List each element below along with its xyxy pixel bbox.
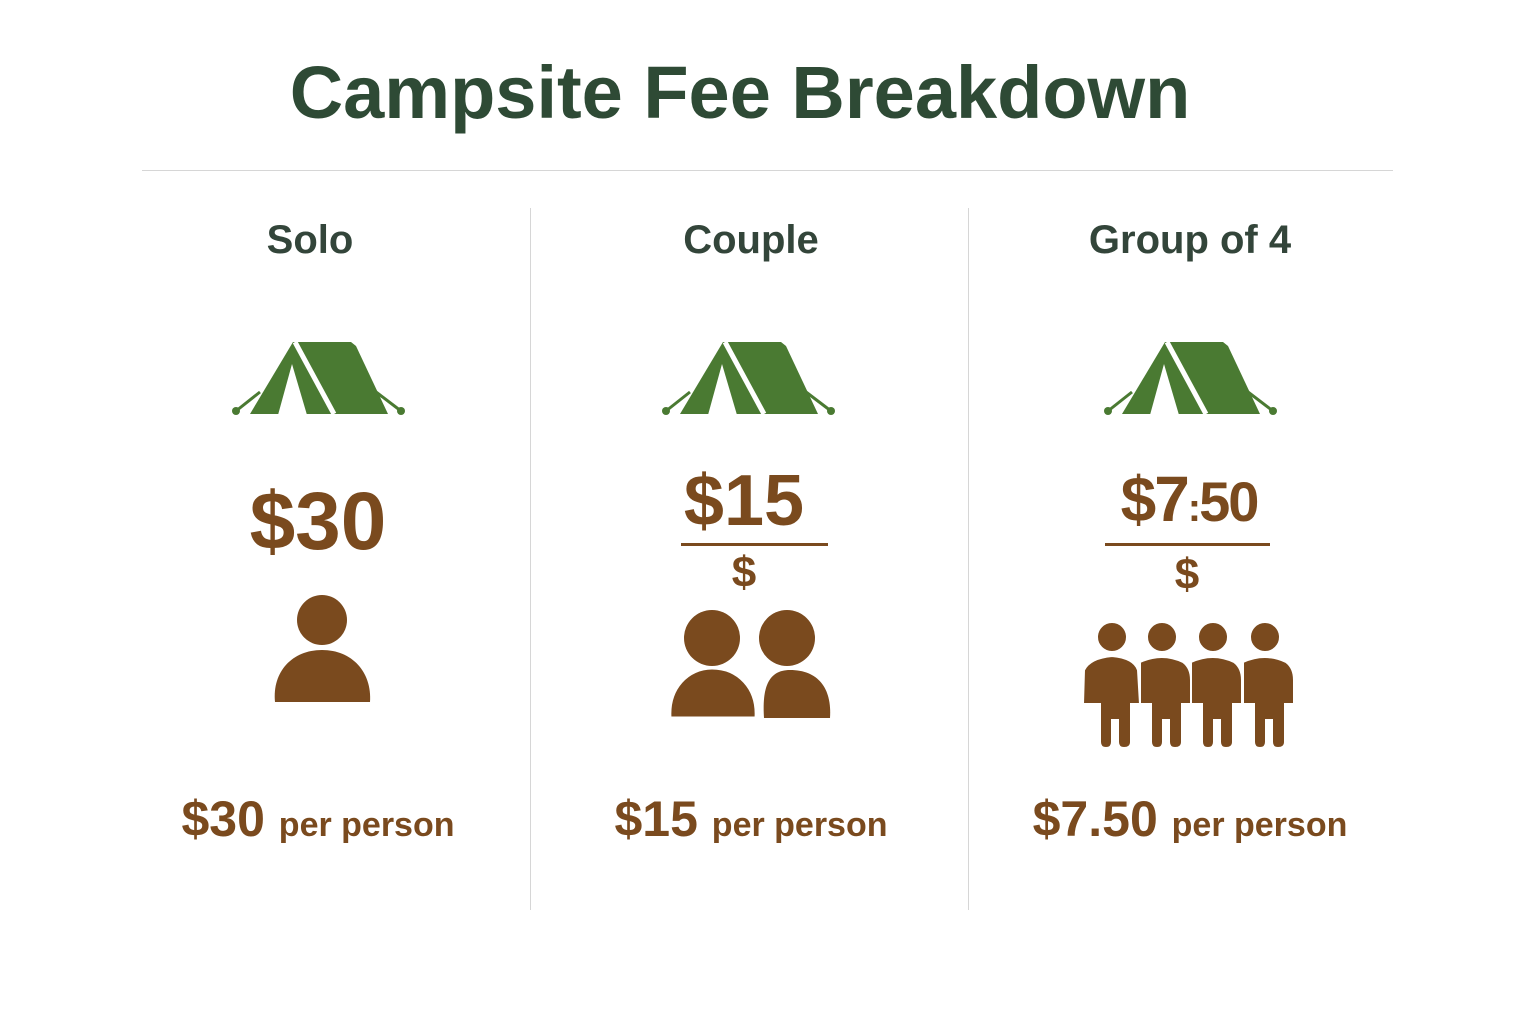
icon: one person — [274, 595, 370, 702]
per person: $15: $15 per person — [614, 791, 888, 847]
price: $15 split — [681, 461, 828, 597]
panel: solo — [181, 218, 455, 847]
per person: $30: $30 per person — [181, 791, 455, 847]
icon: two people — [671, 610, 830, 718]
heading: solo: Solo — [267, 218, 353, 262]
price: $15 split: $ — [732, 548, 756, 597]
icon: tent group — [1104, 342, 1277, 415]
icon: four people — [1084, 623, 1293, 747]
per person: $7.50: $7.50 per person — [1033, 791, 1347, 847]
heading: group of 4: Group of 4 — [1089, 218, 1291, 262]
price: $30: $30 — [250, 476, 386, 567]
price: $7.50 split: $7:50 — [1121, 463, 1257, 535]
heading: couple: Couple — [683, 218, 819, 262]
price: $7.50 split: $ — [1175, 550, 1199, 599]
icon: tent solo — [232, 342, 405, 415]
price: $7.50 split — [1105, 463, 1270, 599]
panel: couple — [614, 218, 888, 847]
icon: tent couple — [662, 342, 835, 415]
title: Campsite Fee Breakdown — [290, 51, 1190, 134]
panel: group of 4 — [1033, 218, 1347, 847]
price: $15 split: $15 — [684, 461, 804, 541]
